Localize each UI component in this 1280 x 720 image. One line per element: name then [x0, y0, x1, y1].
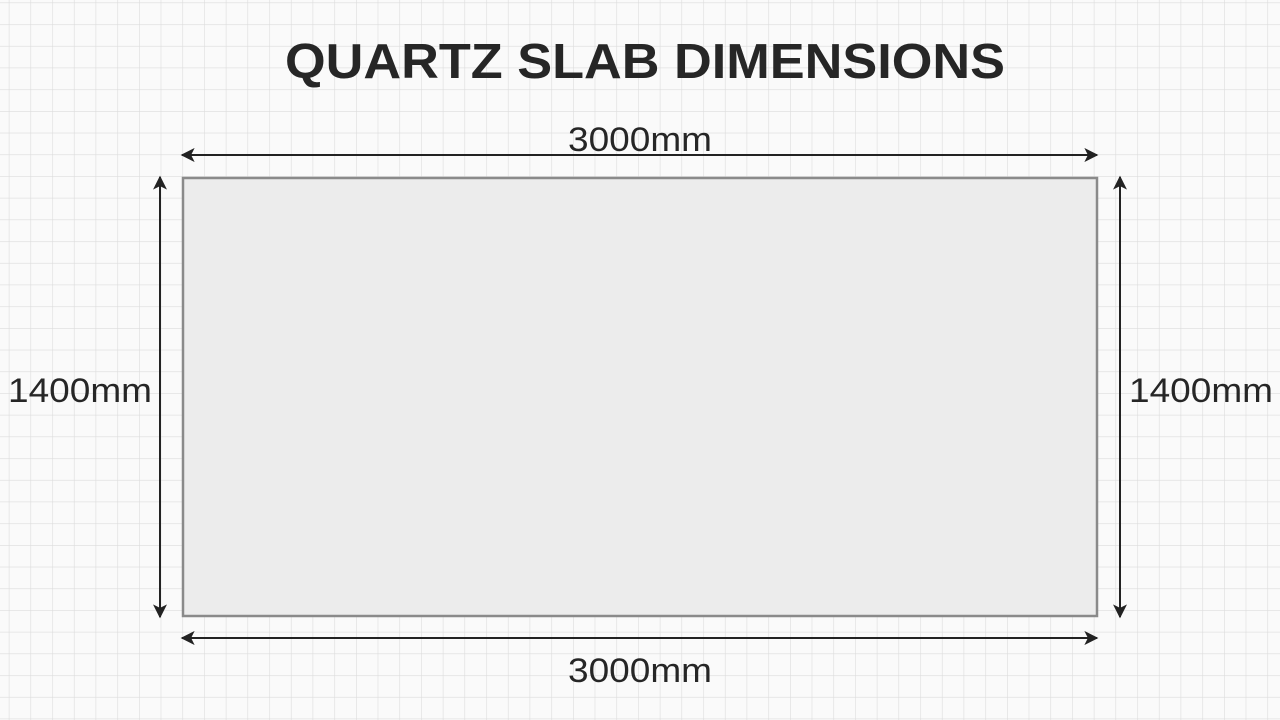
title: QUARTZ SLAB DIMENSIONS	[285, 35, 1005, 89]
label: left 1400mm: 1400mm	[8, 372, 152, 410]
label: bottom 3000mm: 3000mm	[568, 652, 712, 690]
label: right 1400mm: 1400mm	[1129, 372, 1273, 410]
label: top 3000mm: 3000mm	[568, 121, 712, 159]
arrow: left height	[159, 177, 161, 617]
arrow: right height	[1119, 177, 1121, 617]
arrow: bottom width	[182, 637, 1097, 639]
slab	[183, 178, 1097, 616]
arrow: top width	[182, 154, 1097, 156]
